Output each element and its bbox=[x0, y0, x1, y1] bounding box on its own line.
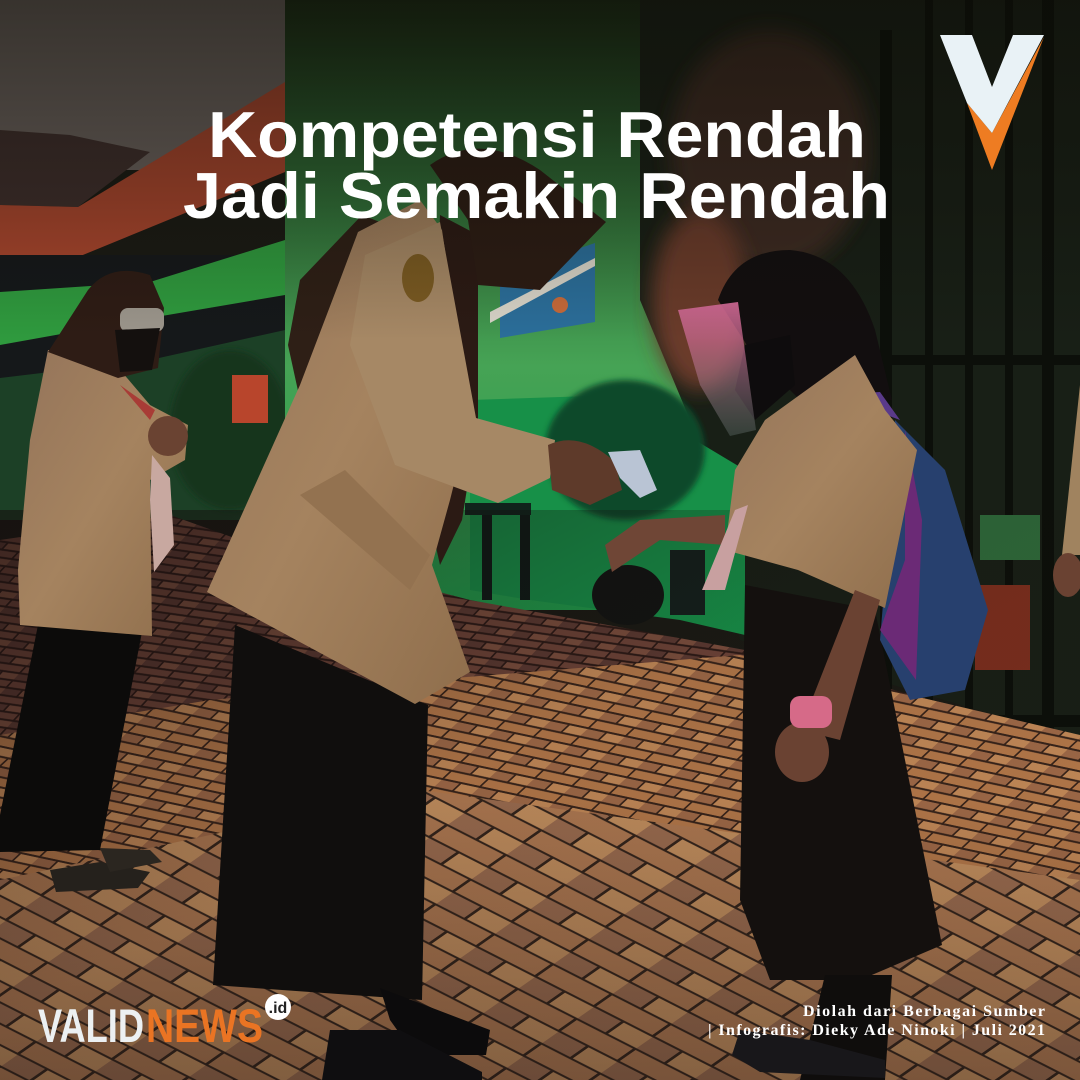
shoulder badge bbox=[402, 254, 434, 302]
skirt bbox=[740, 585, 942, 980]
outstretched arm bbox=[605, 515, 725, 572]
title: Kompetensi Rendah bbox=[208, 98, 866, 171]
skirt bbox=[213, 625, 428, 1000]
wordmark: VALID bbox=[38, 999, 144, 1052]
brick floor far bbox=[0, 515, 1080, 1080]
shirt bbox=[725, 355, 917, 608]
logo: V mark bbox=[940, 35, 1044, 170]
thermometer bbox=[608, 450, 657, 498]
hijab drape bbox=[288, 215, 400, 400]
jacket bbox=[18, 350, 188, 636]
plant bbox=[545, 380, 705, 520]
face shield bbox=[678, 302, 756, 436]
shoulder strap bbox=[795, 392, 900, 480]
id badge: .id bbox=[269, 1000, 287, 1017]
green planter wall base bbox=[470, 395, 745, 635]
backpack bbox=[880, 420, 988, 700]
hijab bbox=[48, 271, 164, 378]
jacket bbox=[207, 200, 470, 704]
skirt bbox=[0, 625, 142, 852]
mask bbox=[735, 335, 795, 420]
logo: ValidNews.id bbox=[38, 994, 291, 1052]
watch bbox=[790, 696, 832, 728]
pocket bbox=[300, 470, 430, 590]
figure: teacher in centre bbox=[207, 149, 657, 1080]
hood and head bbox=[430, 149, 606, 290]
dark trees and fence at right bbox=[640, 0, 1080, 750]
bench and pot bbox=[465, 503, 705, 625]
hand bbox=[548, 440, 622, 505]
sleeve bbox=[350, 222, 555, 503]
floor shading bbox=[0, 510, 1080, 1080]
sky bbox=[0, 0, 290, 170]
title bbox=[183, 98, 890, 232]
id badge bbox=[265, 994, 291, 1020]
hand bbox=[775, 722, 829, 782]
legs and shoes bbox=[800, 975, 892, 1080]
shoes bbox=[50, 862, 150, 892]
backpack strap bbox=[880, 430, 922, 680]
figure: woman on left bbox=[0, 271, 188, 892]
logo: ValidNews.id: NEWS bbox=[146, 999, 263, 1052]
person at right edge bbox=[1053, 385, 1080, 597]
credits: | Infografis: Dieky Ade Ninoki | Juli 2021 bbox=[708, 1022, 1045, 1039]
title: Jadi Semakin Rendah bbox=[183, 159, 890, 232]
hands bbox=[148, 416, 188, 456]
tie bbox=[702, 505, 748, 590]
figure: student with face shield bbox=[605, 250, 988, 1080]
shoes bbox=[380, 988, 490, 1055]
scarf bbox=[150, 455, 174, 572]
green school wall bbox=[285, 0, 705, 610]
brick floor mid bbox=[0, 655, 1080, 1080]
brick floor near bbox=[0, 790, 1080, 1080]
credits bbox=[708, 1003, 1045, 1039]
top dark overlay bbox=[0, 0, 1080, 340]
arm front bbox=[800, 590, 880, 740]
credits: Diolah dari Berbagai Sumber bbox=[803, 1003, 1045, 1020]
tie bbox=[430, 215, 478, 565]
blue wall poster bbox=[490, 243, 595, 338]
left school building bbox=[0, 82, 290, 520]
hair bbox=[718, 250, 892, 400]
